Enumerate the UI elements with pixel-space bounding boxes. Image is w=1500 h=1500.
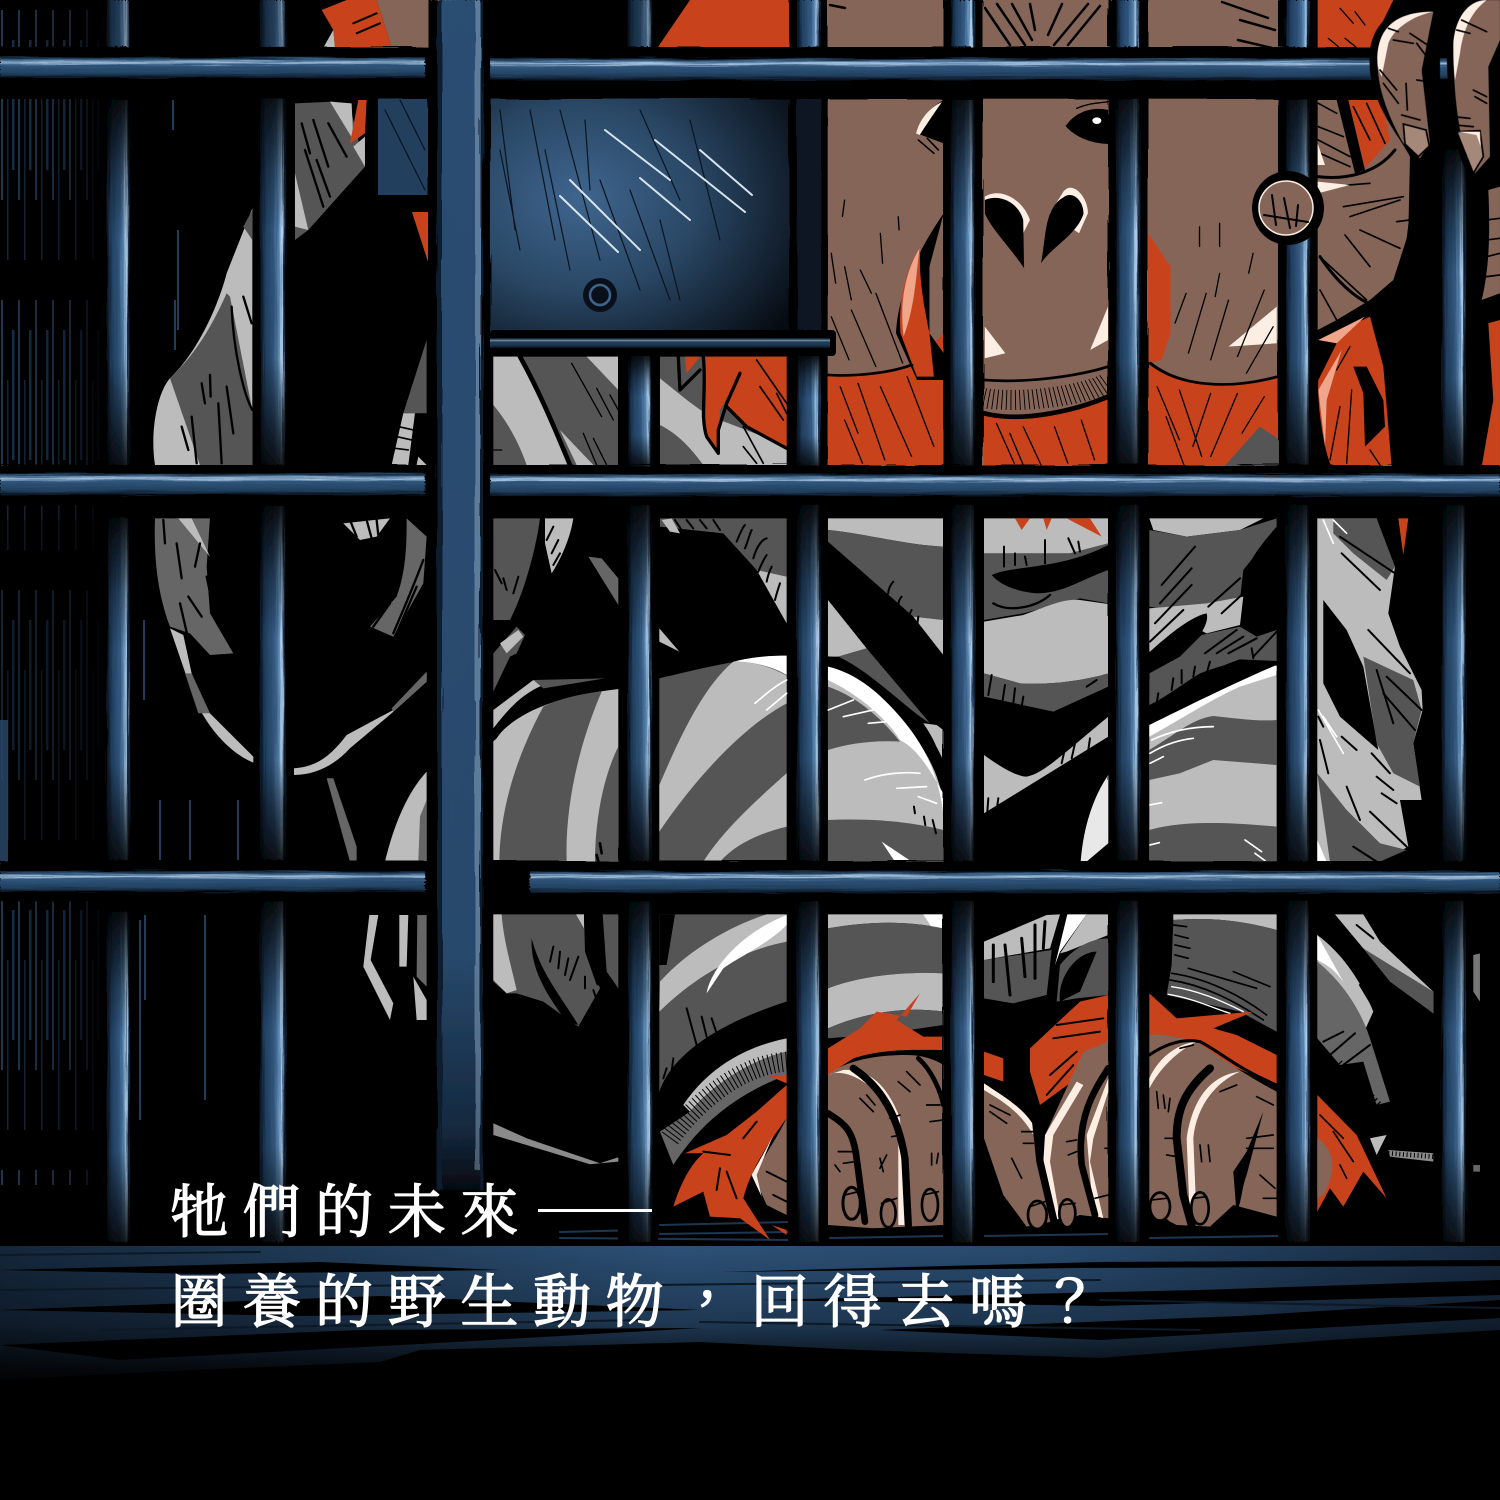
panel A: [493, 518, 618, 862]
striped body, middle row left: [493, 518, 943, 862]
back wall: dark hatched streaks on the left: [0, 0, 238, 1185]
dash: [538, 1209, 652, 1212]
title text: [170, 1165, 1114, 1339]
fur beyond the last bar: [1473, 953, 1480, 1172]
thick central post: [428, 0, 490, 1190]
top row fragments: orange and brown head: [658, 0, 1282, 48]
orangutan face with nose, eye, cheeks and beard: [828, 99, 1280, 467]
bar 9: [1436, 150, 1472, 1242]
bar 2: [260, 0, 286, 1242]
panel E: [1149, 914, 1277, 1227]
bar 8: [1278, 0, 1316, 1242]
beard hatching: [840, 377, 1264, 465]
thumb gripping the bar: [1252, 171, 1324, 245]
left arm, middle and lower rows: [155, 518, 427, 1020]
bar 6: [943, 0, 983, 1242]
eye: [1066, 102, 1108, 144]
orange beard: [828, 213, 1280, 467]
top row orange fur and hand fragment: [322, 0, 463, 48]
panel B: [659, 518, 787, 862]
striped body, middle row right: [984, 518, 1423, 862]
body and right hand, lower row: [984, 914, 1433, 1229]
panel D: [984, 518, 1108, 862]
floor planks: [0, 1222, 1500, 1500]
panel D: [984, 914, 1108, 1229]
nostrils: [985, 188, 1088, 268]
muzzle highlights and lines: [828, 200, 1278, 417]
panel A: [493, 914, 618, 1164]
bar 1: [107, 0, 130, 1242]
left arm, top row: [153, 100, 427, 465]
fingers over the top rail: [1369, 0, 1500, 180]
middle rail: [0, 465, 1500, 505]
metal plate with scratches and bolt: [378, 88, 792, 336]
horizontal rails: [0, 47, 1500, 901]
orange patch below the plate: [412, 212, 428, 262]
panel F: [1317, 518, 1423, 862]
line 2: 圈養的野生動物，回得去嗎？: [170, 1255, 1114, 1339]
left brow: [916, 100, 944, 153]
panel C: [828, 914, 943, 1228]
top rail: [0, 47, 1500, 99]
body and left hand, lower row: [493, 914, 943, 1240]
shelf ledge: [490, 330, 836, 356]
bar 4: [619, 0, 658, 1242]
panel B: [659, 914, 787, 1240]
panel E: [1149, 518, 1277, 862]
stripes and fur under the shelf: [493, 357, 787, 465]
panel C: [828, 518, 943, 862]
line 1: 牠們的未來: [170, 1165, 533, 1249]
black gaps below the rails: [130, 500, 1436, 914]
bar 5: [789, 0, 827, 1242]
panel F: [1317, 914, 1433, 1212]
lower rail: [0, 861, 1500, 901]
bar 7: [1108, 0, 1148, 1242]
right palm, orange hair and black arm: [1318, 0, 1500, 467]
vertical bars: [107, 0, 1472, 1242]
